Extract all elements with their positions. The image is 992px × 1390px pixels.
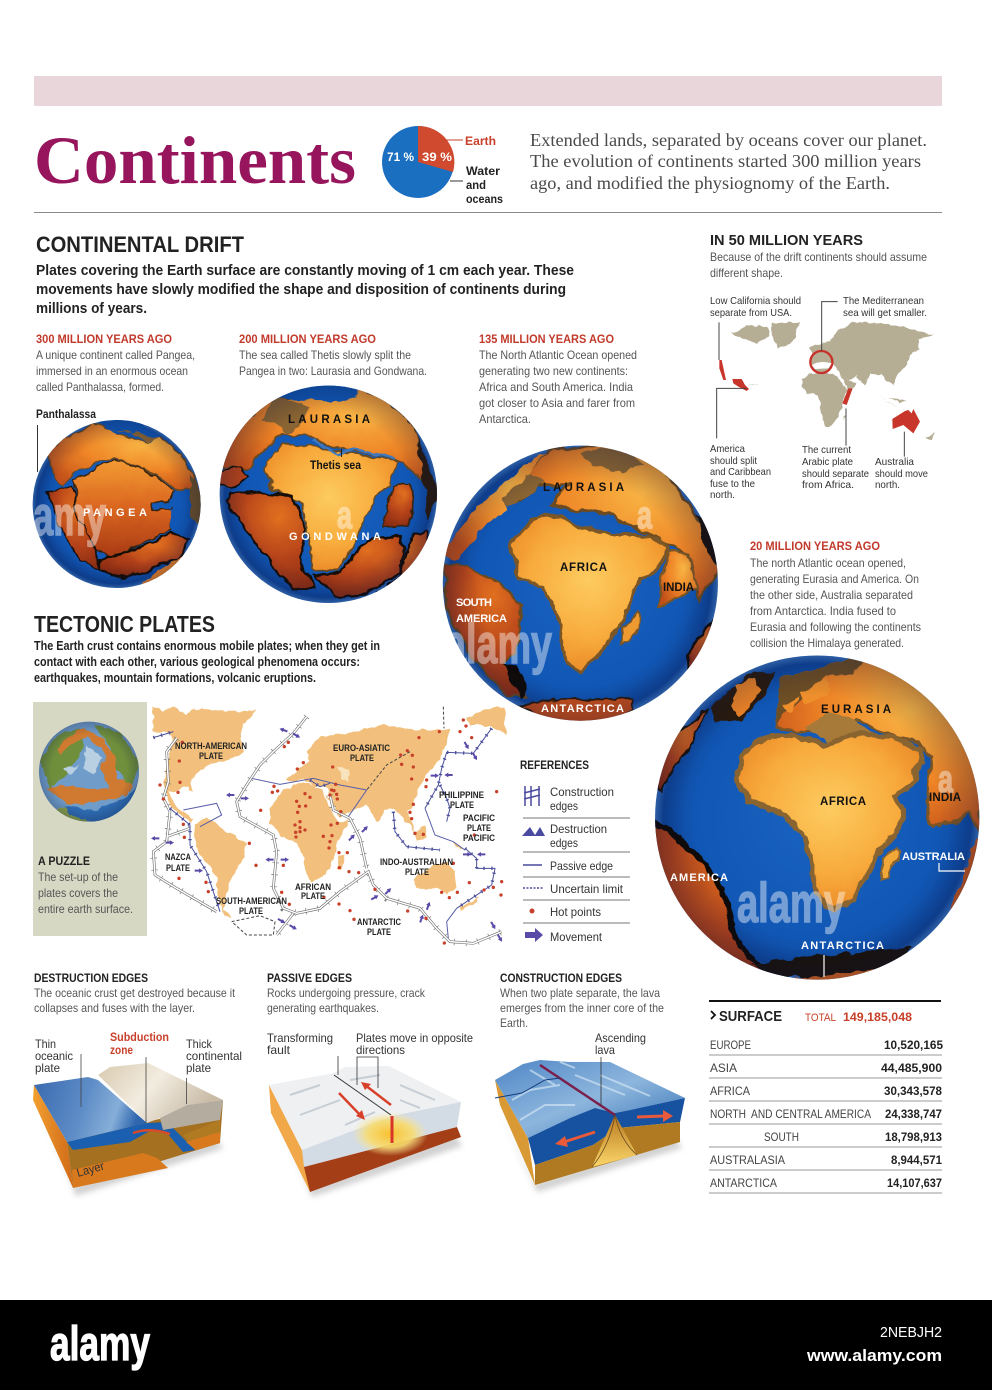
legend: references: edges (550, 799, 578, 813)
table: surface: NORTH AND CENTRAL AMERICA (710, 1107, 871, 1121)
map: future continents: and Caribbean (710, 466, 771, 478)
text: 20 million years ago: the other side, Australia separated (750, 588, 913, 602)
arrow: subduction (133, 1130, 170, 1134)
text: destruction edges (34, 971, 236, 1015)
panel: a puzzle (33, 702, 147, 936)
globe: 20 million years ago: AFRICA (820, 796, 866, 808)
legend: references (520, 760, 630, 944)
text: passive edges (267, 971, 426, 1015)
text: construction edges: When two plate separate, the lava (500, 986, 660, 1000)
diagram: construction edge block (495, 1031, 685, 1192)
icon: hot points (530, 908, 534, 914)
text: 20 million years ago: The north Atlantic ocean opened, (750, 556, 906, 570)
globe: 20 million years ago: ANTARCTICA (801, 940, 884, 952)
text: 300 million years ago: called Panthalassa, formed. (36, 380, 164, 394)
diagram: destruction edge block: plate (186, 1061, 211, 1075)
diagram: destruction edge block: Thick (186, 1037, 213, 1051)
footer watermark bar (0, 1300, 992, 1390)
map: future continents: from Africa. (802, 479, 854, 491)
uncertain limits (232, 707, 444, 935)
text: destruction edges: DESTRUCTION EDGES (34, 971, 148, 985)
globe: 135 million years ago: INDIA (663, 582, 694, 594)
legend: references: Movement (550, 930, 603, 944)
globe: Pangea: amy (33, 484, 106, 547)
plate labels: ANTARCTIC (357, 917, 401, 927)
plate labels: PHILIPPINE (439, 790, 484, 800)
pie chart: earth vs water: oceans (466, 192, 503, 206)
pie chart: earth vs water: 71 % (387, 152, 414, 164)
panel: a puzzle: A PUZZLE (38, 854, 90, 868)
tectonic plates intro (34, 639, 380, 685)
text: construction edges (500, 971, 664, 1030)
text: 20 million years ago (750, 539, 921, 650)
diagram: passive edge block (267, 1031, 473, 1197)
diagram: passive edge block: directions (356, 1043, 405, 1057)
plate labels (165, 741, 495, 937)
map: future continents: should split (710, 455, 757, 467)
table: surface: ANTARCTICA (710, 1176, 777, 1190)
plate labels: INDO-AUSTRALIAN (380, 857, 453, 867)
text: 20 million years ago: from Antarctica. India fused to (750, 604, 896, 618)
table: surface: 44,485,900 (881, 1061, 942, 1075)
legend: references: Passive edge (550, 859, 613, 873)
map: future continents: America (710, 443, 745, 455)
table: surface: EUROPE (710, 1038, 751, 1052)
plate labels: PLATE (467, 823, 491, 833)
diagram: destruction edge block: Layer (75, 1159, 106, 1180)
globe: 20 million years ago: EURASIA (821, 704, 891, 716)
icon: passive edge (523, 864, 542, 866)
globe: Laurasia and Gondwana (217, 382, 440, 603)
continental drift intro (36, 262, 574, 317)
pie chart: earth vs water: Earth (465, 134, 496, 148)
text: 135 million years ago: Antarctica. (479, 412, 531, 426)
continental drift intro: Plates covering the Earth surface are constantly moving of 1 cm each year. These (36, 262, 574, 279)
title: Continents (34, 122, 356, 198)
globe: 20 million years ago (647, 655, 984, 986)
label: Panthalassa (36, 407, 96, 472)
table: surface: SOUTH (764, 1130, 799, 1144)
tectonic plates intro: contact with each other, various geological phenomena occurs: (34, 655, 360, 669)
plate labels: AFRICAN (295, 882, 331, 892)
icon: construction edges (524, 786, 540, 806)
globe: 135 million years ago: AFRICA (560, 562, 607, 574)
globe: 135 million years ago: SOUTH (456, 597, 492, 609)
world tectonic plates map (151, 707, 506, 943)
pie chart: earth vs water: 39 % (422, 152, 452, 164)
map: future continents: The Mediterranean (843, 295, 924, 307)
legend: references: edges (550, 836, 578, 850)
table: surface: 24,338,747 (885, 1107, 942, 1121)
table: surface: 18,798,913 (885, 1130, 942, 1144)
plate labels: PACIFIC (463, 813, 495, 823)
diagram: passive edge block: Plates move in opposite (356, 1031, 473, 1045)
pie chart: earth vs water: and (466, 178, 486, 192)
text: construction edges: CONSTRUCTION EDGES (500, 971, 622, 985)
table: surface (709, 1000, 943, 1193)
legend: references: Hot points (550, 905, 601, 919)
legend: references: Construction (550, 785, 614, 799)
text: 135 million years ago: The North Atlantic Ocean opened (479, 348, 637, 362)
text: in 50 million years: different shape. (710, 266, 783, 280)
legend: references: Uncertain limit (550, 882, 624, 896)
table: surface: 14,107,637 (887, 1176, 942, 1190)
globe: Laurasia and Gondwana: Thetis sea (310, 460, 362, 472)
text: destruction edges: The oceanic crust get destroyed because it (34, 986, 236, 1000)
map: future continents: Low California should (710, 295, 801, 307)
map: future continents: Arabic plate (802, 456, 853, 468)
diagram: destruction edge block: plate (35, 1061, 60, 1075)
text: in 50 million years: IN 50 MILLION YEARS (710, 232, 863, 249)
text: 300 million years ago: A unique continent called Pangea, (36, 348, 195, 362)
construction edges (153, 717, 502, 943)
globe: 20 million years ago: a (938, 759, 954, 801)
text: 200 million years ago: The sea called Thetis slowly split the (239, 348, 411, 362)
plate labels: NORTH-AMERICAN (175, 741, 247, 751)
diagram: destruction edge block: continental (186, 1049, 242, 1063)
globe: 135 million years ago (442, 445, 721, 724)
table: surface: 10,520,165 (884, 1038, 943, 1052)
map: future continents: The current (802, 444, 851, 456)
footer watermark bar: alamy (50, 1318, 150, 1371)
icon: plates globe (39, 722, 140, 823)
globe: 135 million years ago: ANTARCTICA (541, 703, 624, 715)
continental drift intro: movements have slowly modified the shape and disposition of continents during (36, 281, 566, 298)
arrows: plates separating (564, 1116, 664, 1142)
top band (34, 76, 942, 106)
map: future continents: should move (875, 468, 928, 480)
plate labels: PLATE (166, 863, 190, 873)
plate labels: PLATE (350, 753, 374, 763)
globe: 20 million years ago: alamy (737, 871, 845, 934)
table: surface: TOTAL (805, 1012, 836, 1024)
map: future continents: separate from USA. (710, 307, 792, 319)
text: 135 million years ago: got closer to Asia and farer from (479, 396, 635, 410)
plate labels: PACIFIC (463, 833, 495, 843)
icon: destruction edges (522, 827, 545, 836)
plate labels: EURO-ASIATIC (333, 743, 390, 753)
plate labels: NAZCA (165, 852, 191, 862)
diagram: construction edge block: lava (595, 1043, 615, 1057)
text: 20 million years ago: Eurasia and following the continents (750, 620, 921, 634)
diagram: destruction edge block: zone (110, 1043, 133, 1057)
panel: a puzzle: The set-up of the (38, 870, 118, 884)
continents (152, 707, 506, 918)
text: 20 million years ago: generating Eurasia and America. On (750, 572, 919, 586)
intro text: Extended lands, separated by oceans cover our planet. (530, 130, 927, 150)
pie chart: earth vs water (382, 126, 503, 206)
globe: 20 million years ago: AMERICA (670, 872, 728, 884)
heading: continental drift: CONTINENTAL DRIFT (36, 232, 245, 257)
map: future continents: Australia (875, 456, 914, 468)
text: passive edges: Rocks undergoing pressure, crack (267, 986, 426, 1000)
diagram: destruction edge block: oceanic (35, 1049, 73, 1063)
text: 300 million years ago: immersed in an enormous ocean (36, 364, 188, 378)
text: 135 million years ago: generating two new continents: (479, 364, 628, 378)
tectonic plates intro: The Earth crust contains enormous mobile plates; when they get in (34, 639, 380, 653)
text: 135 million years ago (479, 332, 637, 426)
text: in 50 million years: Because of the drift continents should assume (710, 250, 927, 264)
plate labels: PLATE (367, 927, 391, 937)
text: 20 million years ago: collision the Himalaya generated. (750, 636, 904, 650)
table: surface: AUSTRALASIA (710, 1153, 785, 1167)
text: construction edges: Earth. (500, 1016, 528, 1030)
text: 200 million years ago: Pangea in two: Laurasia and Gondwana. (239, 364, 427, 378)
table: surface: SURFACE (719, 1008, 782, 1025)
footer watermark bar: www.alamy.com (806, 1346, 942, 1365)
map: future continents: sea will get smaller. (843, 307, 927, 319)
icon: movement (525, 928, 543, 942)
hot points (160, 720, 502, 943)
passive edges (183, 778, 465, 938)
tectonic plates intro: earthquakes, mountain formations, volcanic eruptions. (34, 671, 316, 685)
text: 135 million years ago: 135 MILLION YEARS AGO (479, 332, 614, 346)
text: construction edges: emerges from the inner core of the (500, 1001, 664, 1015)
globe: Pangea: PANGEA (83, 507, 147, 519)
table: surface: 149,185,048 (843, 1010, 912, 1024)
globe: Laurasia and Gondwana: a (337, 495, 353, 537)
label: Panthalassa: Panthalassa (36, 407, 96, 421)
table: surface: 8,944,571 (891, 1153, 942, 1167)
globe: 20 million years ago: AUSTRALIA (902, 851, 965, 863)
legend: references: REFERENCES (520, 760, 589, 772)
plate labels: SOUTH-AMERICAN (216, 896, 287, 906)
table: surface: ASIA (710, 1061, 737, 1075)
plate labels: PLATE (301, 891, 325, 901)
text: 200 million years ago (239, 332, 427, 378)
plate labels: PLATE (405, 867, 429, 877)
globe: Laurasia and Gondwana: GONDWANA (289, 531, 381, 543)
table: surface: 30,343,578 (884, 1084, 942, 1098)
arrows: opposite directions (339, 1085, 391, 1118)
text: 20 million years ago: 20 MILLION YEARS AGO (750, 539, 880, 553)
globe: 135 million years ago: a (637, 495, 653, 537)
diagram: construction edge block: Ascending (595, 1031, 646, 1045)
heading: tectonic plates: TECTONIC PLATES (34, 611, 215, 637)
continental drift intro: millions of years. (36, 300, 147, 317)
text: 200 million years ago: 200 MILLION YEARS AGO (239, 332, 376, 346)
plate labels: PLATE (239, 906, 263, 916)
plate labels: PLATE (199, 751, 223, 761)
pie chart: earth vs water: Water (466, 164, 500, 178)
globe: Pangea (33, 418, 202, 590)
panel: a puzzle: entire earth surface. (38, 902, 133, 916)
globe: 135 million years ago: LAURASIA (543, 482, 624, 494)
legend: references: Destruction (550, 822, 607, 836)
globe: 135 million years ago: alamy (445, 612, 552, 675)
text: 300 million years ago (36, 332, 195, 394)
diagram: passive edge block: fault (267, 1043, 291, 1057)
footer watermark bar: 2NEBJH2 (880, 1324, 942, 1341)
text: in 50 million years (710, 232, 927, 280)
globe: 135 million years ago: AMERICA (456, 613, 507, 625)
plate labels: PLATE (450, 800, 474, 810)
panel: a puzzle: plates covers the (38, 886, 118, 900)
text: 300 million years ago: 300 MILLION YEARS AGO (36, 332, 172, 346)
diagram: destruction edge block (33, 1030, 242, 1196)
text: destruction edges: collapses and fuses with the layer. (34, 1001, 195, 1015)
map: future continents (710, 295, 935, 501)
globe: Laurasia and Gondwana: LAURASIA (288, 414, 370, 426)
destruction edges (153, 728, 495, 912)
globe: 20 million years ago: INDIA (929, 792, 961, 804)
text: passive edges: generating earthquakes. (267, 1001, 379, 1015)
intro text (530, 130, 927, 193)
movement arrows (151, 726, 504, 943)
map: future continents: north. (710, 489, 735, 501)
diagram: destruction edge block: Subduction (110, 1030, 169, 1044)
icon: uncertain limit (523, 887, 543, 889)
text: passive edges: PASSIVE EDGES (267, 971, 352, 985)
text: 135 million years ago: Africa and South America. India (479, 380, 633, 394)
map: future continents: fuse to the (710, 478, 755, 490)
table: surface: AFRICA (710, 1084, 750, 1098)
intro text: The evolution of continents started 300 million years (530, 151, 921, 171)
diagram: passive edge block: Transforming (267, 1031, 333, 1045)
map: future continents: north. (875, 479, 900, 491)
diagram: destruction edge block: Thin (35, 1037, 56, 1051)
map: future continents: should separate (802, 468, 869, 480)
intro text: ago, and modified the physiognomy of the Earth. (530, 173, 890, 193)
